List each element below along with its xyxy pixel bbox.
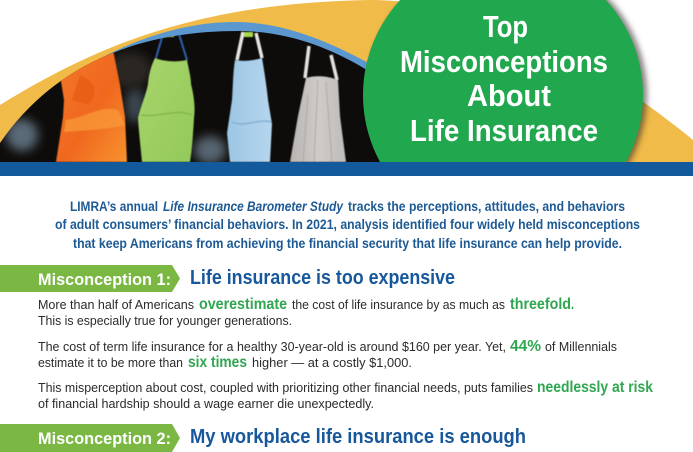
- misconception 1 body: six times: [188, 354, 247, 371]
- misconception 1 body: overestimate: [199, 296, 287, 313]
- mask: green: [138, 33, 195, 162]
- intro paragraph: of adult consumers’ financial behaviors. In 2021, analysis identified four widely held misconceptions: [55, 217, 640, 232]
- misconception 1 body: 44%: [510, 338, 541, 355]
- intro paragraph: [55, 199, 640, 251]
- green title circle: [363, 0, 652, 162]
- misconception 1 body: .: [571, 296, 574, 313]
- yellow swoosh: [0, 0, 693, 162]
- title: About: [467, 78, 551, 113]
- misconception 1 body: threefold: [510, 296, 571, 313]
- misconception 1 body: needlessly at risk: [537, 379, 653, 396]
- intro paragraph: tracks the perceptions, attitudes, and behaviors: [348, 199, 625, 214]
- photo: hanging face masks: [0, 31, 380, 162]
- misconception 1 body: estimate it to be more than: [38, 356, 183, 370]
- blue arc: [65, 22, 385, 100]
- mask: light blue: [227, 32, 272, 162]
- misconception 1 banner: [0, 265, 180, 292]
- intro paragraph: that keep Americans from achieving the financial security that life insurance can help provide.: [73, 236, 622, 251]
- title: Life Insurance: [410, 113, 598, 148]
- title: Top: [483, 9, 528, 44]
- title: Misconceptions: [400, 44, 608, 79]
- misconception 2 banner: Misconception 2:: [38, 429, 171, 448]
- misconception 1 heading: Life insurance is too expensive: [190, 267, 455, 289]
- misconception 1 banner: Misconception 1:: [38, 270, 171, 289]
- misconception 1 body: This misperception about cost, coupled with prioritizing other financial needs, puts families: [38, 381, 533, 395]
- misconception 1 body: of financial hardship should a wage earner die unexpectedly.: [38, 397, 374, 411]
- misconception 1 body: the cost of life insurance by as much as: [292, 298, 505, 312]
- misconception 2 heading: My workplace life insurance is enough: [190, 426, 526, 448]
- misconception 1 body: More than half of Americans: [38, 298, 194, 312]
- blue band: [0, 162, 693, 176]
- misconception 1 body: higher — at a costly $1,000.: [252, 356, 412, 370]
- mask: orange: [56, 50, 127, 162]
- misconception 1 body: The cost of term life insurance for a healthy 30-year-old is around $160 per year. Yet,: [38, 340, 506, 354]
- title: [400, 9, 608, 148]
- header banner: [0, 0, 693, 162]
- intro paragraph: Life Insurance Barometer Study: [163, 199, 344, 214]
- mask: grey: [290, 46, 346, 162]
- intro paragraph: LIMRA’s annual: [70, 199, 158, 214]
- misconception 2 banner: [0, 424, 180, 452]
- misconception 1 body: [38, 296, 653, 411]
- misconception 1 body: of Millennials: [545, 340, 617, 354]
- misconception 1 body: This is especially true for younger generations.: [38, 314, 292, 328]
